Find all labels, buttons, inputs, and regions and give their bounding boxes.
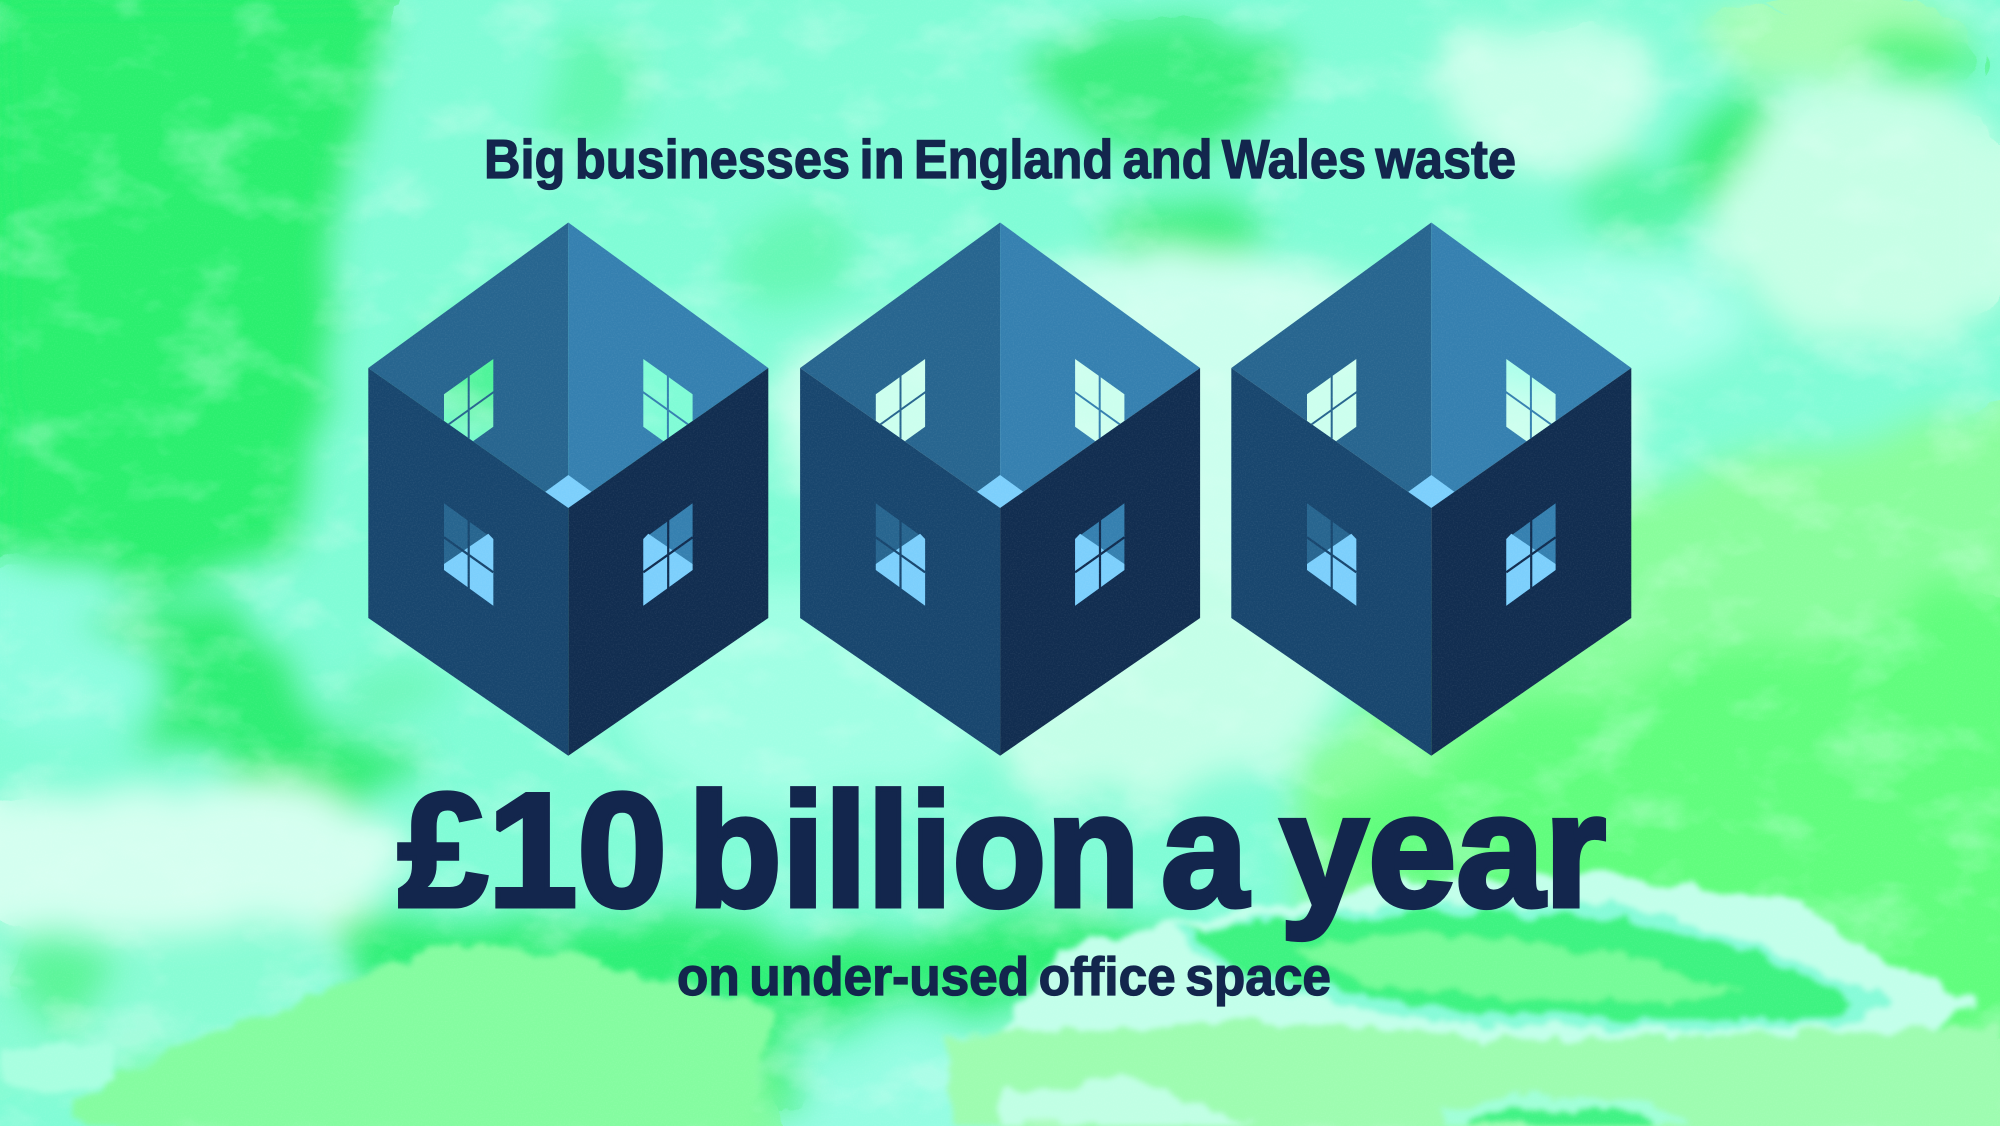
headline figure: a (1161, 760, 1250, 941)
floor (545, 475, 592, 508)
closing line: on under-used office space (677, 947, 1331, 1007)
headline figure: year (1280, 760, 1606, 941)
back walls with window openings (1231, 222, 1631, 508)
front left wall with window (1231, 368, 1431, 756)
headline figure: £10 (398, 760, 667, 941)
front left wall with window (368, 368, 568, 756)
front right wall with window (1431, 368, 1631, 756)
back walls with window openings (800, 222, 1200, 508)
cube building 2 (800, 222, 1200, 756)
back walls with window openings (368, 222, 768, 508)
cube building 3 (1231, 222, 1631, 756)
floor (977, 475, 1024, 508)
front right wall with window (568, 368, 768, 756)
headline figure (398, 760, 1606, 941)
headline figure: billion (688, 760, 1140, 941)
front right wall with window (1000, 368, 1200, 756)
cube building 1 (368, 222, 768, 756)
front left wall with window (800, 368, 1000, 756)
floor (1408, 475, 1455, 508)
heading: intro line: Big businesses in England and Wales waste (484, 128, 1516, 190)
